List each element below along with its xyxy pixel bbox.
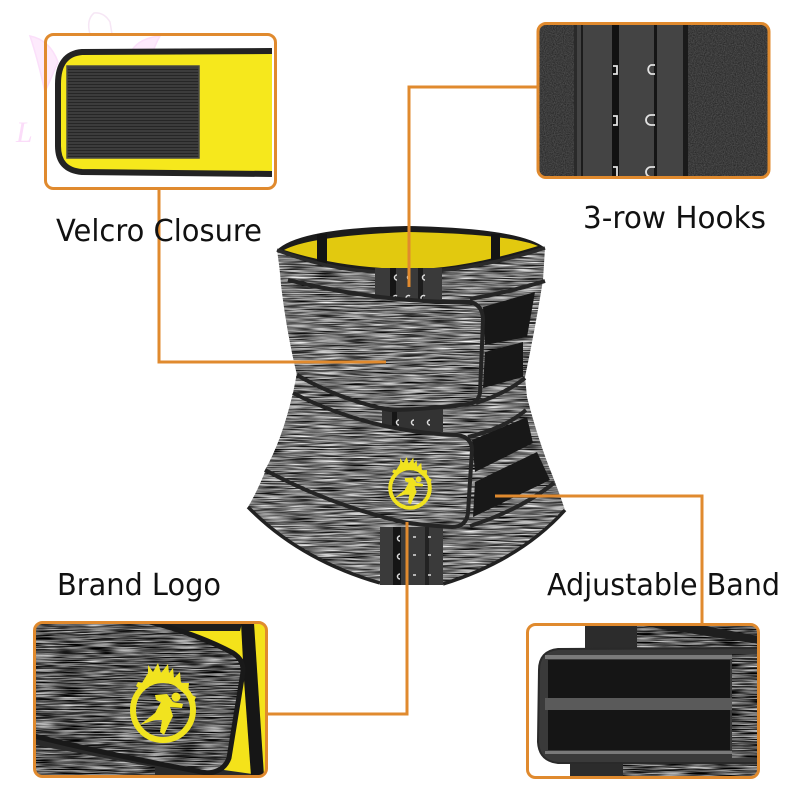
connector: velcro closure <box>159 189 386 362</box>
fabric close-up <box>538 24 768 177</box>
velcro strip 2 <box>548 710 730 750</box>
right strap bindings <box>468 281 554 526</box>
heathered body <box>240 240 575 590</box>
waist trainer product <box>240 226 575 590</box>
connector: adjustable band <box>495 496 702 624</box>
watermark: pink logo <box>15 13 160 149</box>
label: velcro closure: Velcro Closure <box>56 214 262 249</box>
background garment bottom <box>623 764 757 776</box>
lower wrap strap <box>262 390 474 530</box>
background garment top <box>637 626 757 648</box>
yellow inner lining <box>277 226 545 275</box>
outer seam lines <box>248 507 565 584</box>
hook section: top <box>375 268 442 301</box>
watermark: pink logo: L <box>15 116 33 149</box>
hook section: bottom <box>380 527 443 585</box>
lower band fabric <box>36 624 241 770</box>
connector: 3-row hooks <box>409 87 537 287</box>
top rim binding <box>277 248 545 272</box>
label: adjustable band: Adjustable Band <box>547 568 780 603</box>
hooks and eyes <box>613 65 655 177</box>
panel: 3-row hooks <box>538 24 769 178</box>
black strap <box>241 623 264 776</box>
panel: velcro closure <box>46 34 278 188</box>
top dark strap <box>168 624 242 631</box>
label: 3-row hooks: 3-row Hooks <box>583 201 766 236</box>
upper wrap strap <box>280 278 485 413</box>
upper velcro strips <box>483 292 535 388</box>
hook section: middle <box>382 408 443 432</box>
connector: brand logo <box>267 522 407 714</box>
belt end with yellow lining <box>58 51 272 174</box>
icon: flame runner logo <box>390 457 432 508</box>
panel: brand logo <box>30 620 266 777</box>
label: brand logo: Brand Logo <box>57 568 221 603</box>
panel: adjustable band <box>528 624 760 778</box>
velcro strip 1 <box>548 660 730 698</box>
yellow lining <box>188 624 265 774</box>
velcro patch <box>67 66 199 158</box>
icon: flame runner logo large <box>133 663 196 740</box>
strap <box>538 648 760 763</box>
lower velcro strips <box>472 417 550 517</box>
